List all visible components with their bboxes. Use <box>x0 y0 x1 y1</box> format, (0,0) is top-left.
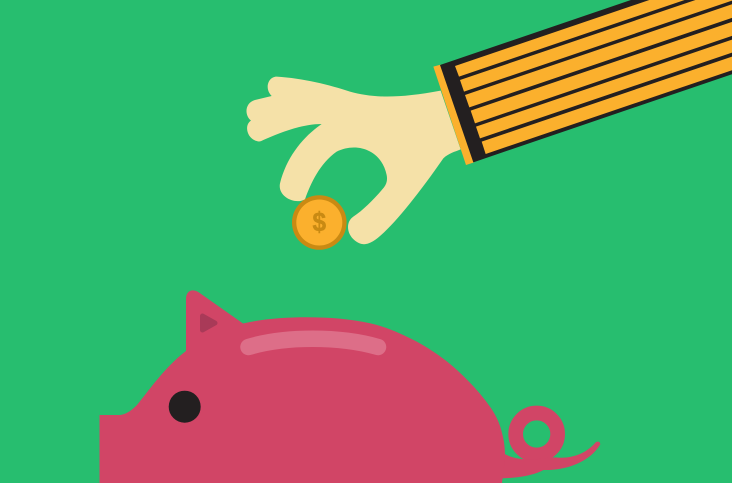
sleeve stripes <box>455 0 732 154</box>
pig body <box>100 290 505 483</box>
sleeve black base and cuff <box>440 0 732 162</box>
pig tail <box>497 413 600 478</box>
coin rim <box>292 195 347 250</box>
sleeve cuff edge <box>433 65 474 165</box>
hand <box>246 77 461 244</box>
sleeve <box>433 0 732 165</box>
dollar sign: $ <box>313 208 326 237</box>
pig back highlight <box>248 339 378 347</box>
pig ear inner <box>202 316 215 330</box>
coin <box>292 195 347 250</box>
pig eye <box>169 391 201 423</box>
icon: piggy bank <box>100 290 600 483</box>
coin face <box>296 200 342 246</box>
